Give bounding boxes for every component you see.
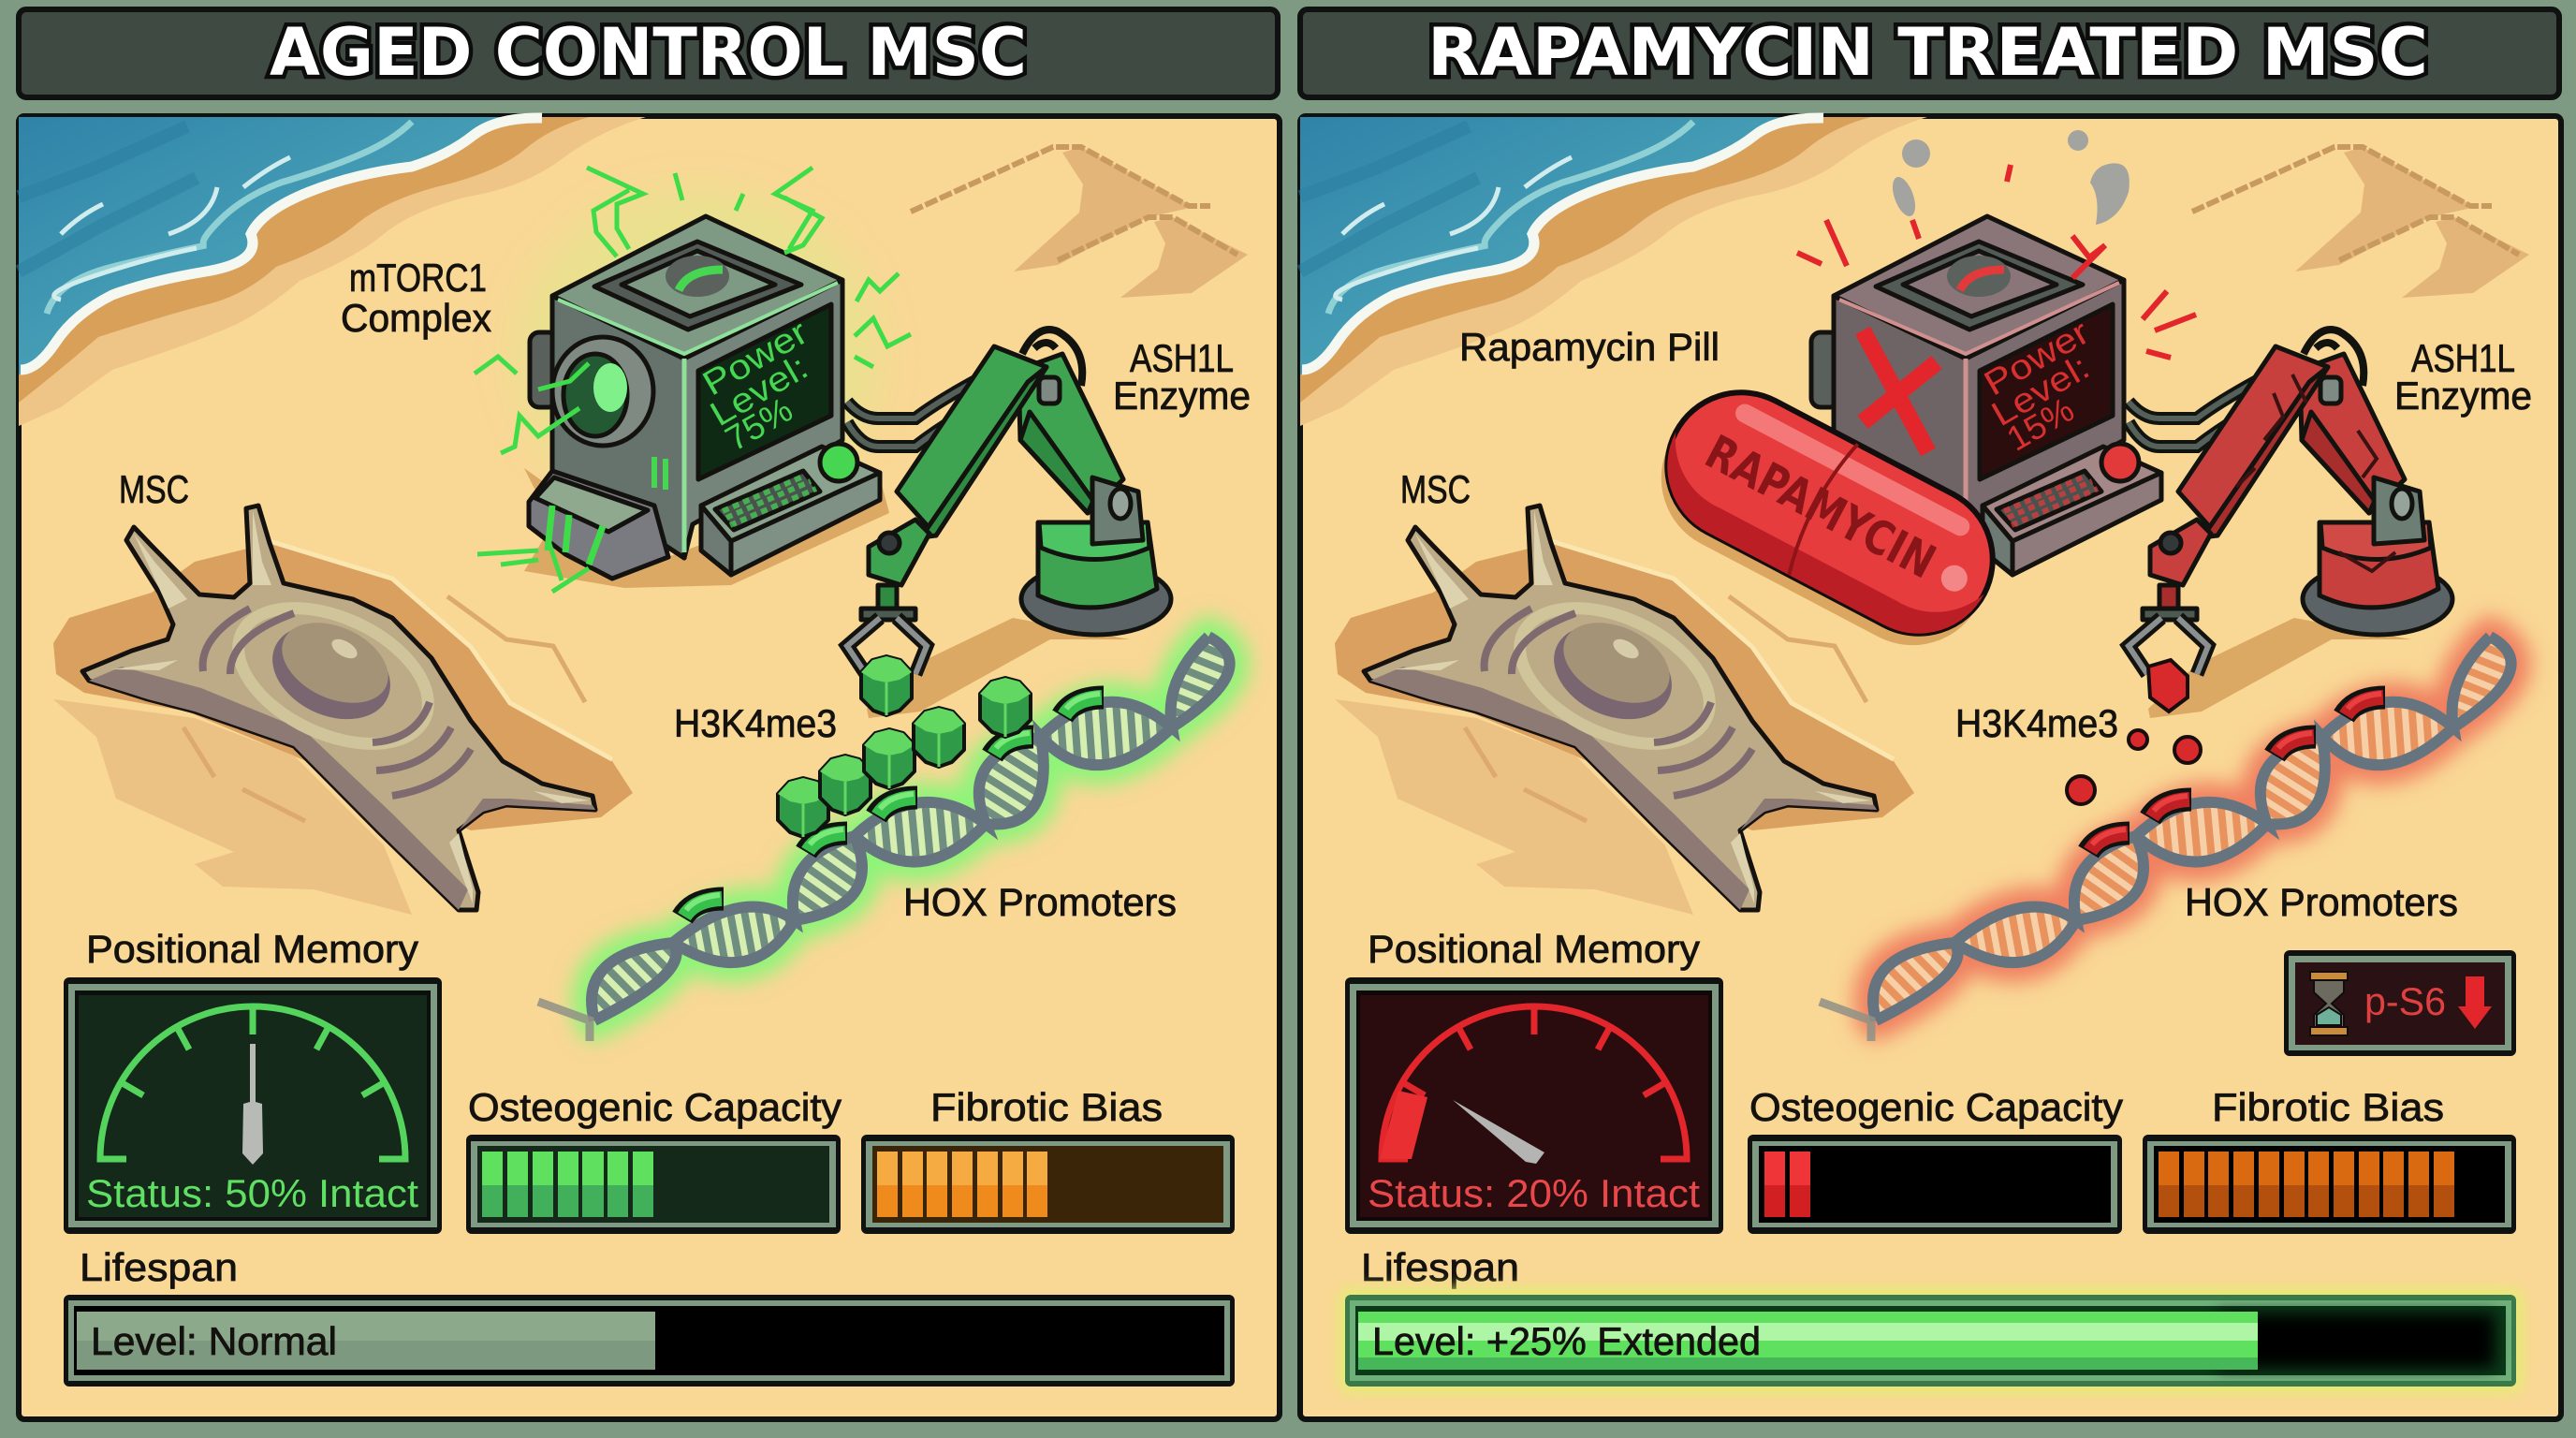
power screen text: 15% xyxy=(2000,390,2080,459)
MSC cell xyxy=(53,506,633,915)
machine shadow xyxy=(524,468,889,588)
panel: rapamycin treated xyxy=(1300,9,2561,1419)
power screen text: Power xyxy=(696,313,814,403)
arm cracks xyxy=(2236,374,2395,571)
label: HOX Promoters: HOX Promoters xyxy=(903,880,1177,924)
HOX DNA helix xyxy=(538,637,1230,1041)
label: H3K4me3: H3K4me3 xyxy=(1955,701,2118,745)
label: Positional Memory: Positional Memory xyxy=(86,927,418,971)
green energy sparks xyxy=(475,168,911,592)
label: Fibrotic Bias: Fibrotic Bias xyxy=(2212,1085,2444,1129)
beach background xyxy=(1300,117,2529,426)
broken cube fragments xyxy=(2067,660,2201,804)
beach background xyxy=(19,117,1248,426)
label: H3K4me3: H3K4me3 xyxy=(674,701,837,745)
positional memory gauge xyxy=(1345,977,1723,1234)
label: Osteogenic Capacity: Osteogenic Capacity xyxy=(1749,1085,2123,1129)
H3K4me3 damaged marks xyxy=(2088,694,2385,852)
power screen text: Power xyxy=(1978,313,2096,403)
hourglass icon xyxy=(2310,972,2348,1035)
porthole xyxy=(552,337,653,446)
DNA glow xyxy=(1873,637,2511,1020)
red X mark xyxy=(1863,330,1937,452)
lower module xyxy=(529,471,668,579)
pill label: RAPAMYCIN xyxy=(1697,425,1944,590)
label: Fibrotic Bias: Fibrotic Bias xyxy=(930,1085,1163,1129)
arm shadow xyxy=(2148,618,2411,718)
power screen text xyxy=(696,313,814,459)
panel: aged control xyxy=(19,9,1280,1419)
lifespan bar glowing xyxy=(1339,1289,2522,1392)
label: HOX Promoters: HOX Promoters xyxy=(2185,880,2458,924)
p-S6 indicator xyxy=(2284,950,2516,1056)
smoke xyxy=(1888,130,2130,225)
arm shadow xyxy=(867,618,1130,718)
title: RAPAMYCIN TREATED MSC xyxy=(1427,14,2428,91)
labels xyxy=(80,256,1251,1289)
red level fill xyxy=(1380,1091,1427,1159)
ASH1L robot arm damaged xyxy=(2129,330,2452,674)
lifespan level: Level: +25% Extended xyxy=(1372,1319,1761,1363)
H3K4me3 cubes xyxy=(778,656,1031,837)
down arrow xyxy=(2458,976,2492,1029)
power screen text: Level: xyxy=(704,347,814,433)
rapamycin pill xyxy=(1635,367,2018,671)
fibrotic bias bar xyxy=(861,1135,1235,1234)
label: Positional Memory: Positional Memory xyxy=(1368,927,1700,971)
panel frame xyxy=(19,9,1280,1419)
label: Lifespan: Lifespan xyxy=(1361,1245,1519,1289)
label: Complex: Complex xyxy=(341,296,491,340)
label: ASH1L: ASH1L xyxy=(1130,336,1234,380)
label: Lifespan: Lifespan xyxy=(80,1245,238,1289)
osteogenic capacity bar xyxy=(1748,1135,2122,1234)
panel frame xyxy=(1300,9,2561,1419)
label: ASH1L: ASH1L xyxy=(2411,336,2515,380)
labels xyxy=(1361,325,2532,1289)
vent slits xyxy=(654,457,666,490)
H3K4me3 marks on DNA xyxy=(682,694,1104,917)
machine glow xyxy=(463,140,931,571)
power screen text: 75% xyxy=(719,390,798,459)
mTORC1 machine damaged xyxy=(1811,216,2161,575)
needle xyxy=(1453,1100,1544,1164)
label: Enzyme: Enzyme xyxy=(2394,374,2532,418)
gauge status: Status: 20% Intact xyxy=(1368,1171,1700,1215)
ASH1L robot arm xyxy=(847,330,1171,674)
gauge status: Status: 50% Intact xyxy=(86,1171,418,1215)
lifespan bar xyxy=(64,1295,1235,1387)
positional memory gauge xyxy=(64,977,442,1234)
label: MSC: MSC xyxy=(1400,467,1471,511)
label: Enzyme: Enzyme xyxy=(1113,374,1251,418)
lifespan level: Level: Normal xyxy=(91,1319,337,1363)
label: MSC: MSC xyxy=(119,467,189,511)
DNA glow xyxy=(592,637,1230,1020)
osteogenic capacity bar xyxy=(466,1135,841,1234)
label: Rapamycin Pill: Rapamycin Pill xyxy=(1459,325,1720,369)
power screen text: Level: xyxy=(1985,347,2096,433)
power screen text xyxy=(1978,313,2096,459)
module prongs xyxy=(548,506,603,565)
mTORC1 machine xyxy=(529,216,880,579)
title: AGED CONTROL MSC xyxy=(270,14,1027,91)
MSC cell xyxy=(1335,506,1914,915)
red sparks xyxy=(1797,165,2196,358)
p-S6 text: p-S6 xyxy=(2364,979,2446,1023)
HOX DNA helix xyxy=(1820,637,2511,1041)
fibrotic bias bar xyxy=(2143,1135,2516,1234)
label: mTORC1: mTORC1 xyxy=(349,256,487,300)
label: Osteogenic Capacity: Osteogenic Capacity xyxy=(468,1085,842,1129)
